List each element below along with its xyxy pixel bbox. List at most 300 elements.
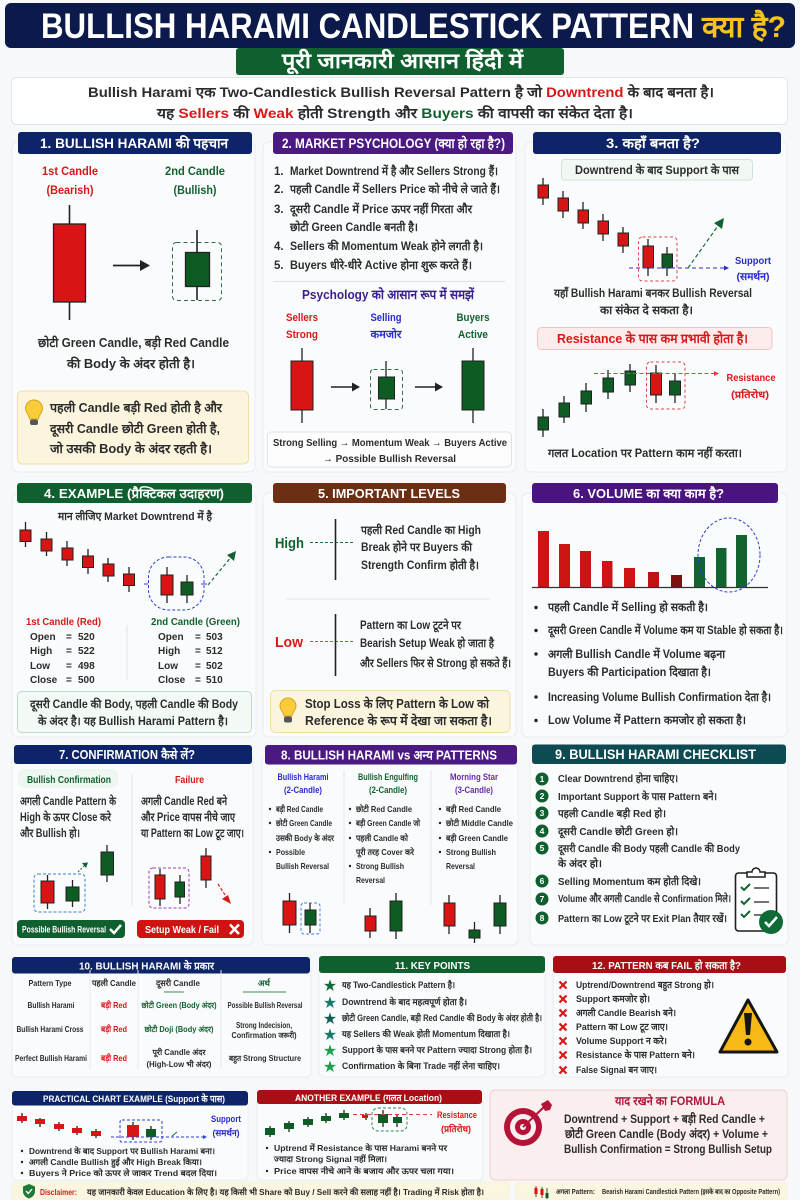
heading 7 bbox=[14, 745, 252, 764]
panel: formula bbox=[490, 1090, 787, 1180]
heading 3: 3. कहाँ बनता है? bbox=[606, 135, 700, 151]
first candle data: 498 bbox=[78, 661, 95, 672]
table row: harami cross: बड़ी Red bbox=[100, 1024, 127, 1034]
numbered list bbox=[274, 164, 500, 273]
icon: warning triangle bbox=[720, 1000, 777, 1052]
failure result button: Setup Weak / Fail bbox=[145, 924, 219, 936]
table header row bbox=[28, 978, 286, 992]
heading bbox=[12, 1091, 248, 1106]
heading 4 bbox=[17, 483, 252, 503]
resistance pill bbox=[538, 328, 772, 350]
table row: bullish harami: Bullish Harami bbox=[28, 1001, 74, 1010]
column: morning star: बड़ी Red Candle bbox=[445, 804, 501, 814]
checklist items: Volume और अगली Candle से Confirmation मिले। bbox=[558, 892, 731, 905]
key point items: ★ bbox=[324, 1027, 337, 1042]
resistance label bbox=[437, 1110, 477, 1134]
bullets: Buyers ने Price को ऊपर ले जाकर Trend बदल दिया। bbox=[29, 1168, 217, 1178]
conclusion box: दूसरी Candle की Body, पहली Candle की Body bbox=[29, 697, 239, 712]
support pill: Downtrend के बाद Support के पास bbox=[575, 163, 740, 177]
blue highlight bbox=[144, 557, 207, 610]
bullets: ज्यादा Strong Signal नहीं मिला। bbox=[273, 1154, 387, 1164]
heading 11 bbox=[319, 956, 545, 973]
next pattern bar bbox=[516, 1183, 787, 1199]
column: bullish harami: बड़ी Red Candle bbox=[275, 804, 323, 814]
disclaimer bar bbox=[12, 1182, 509, 1199]
numbered list: दूसरी Candle में Price ऊपर नहीं गिरता और bbox=[289, 202, 473, 217]
column: bullish engulfing bbox=[349, 772, 421, 885]
resistance label: Resistance bbox=[726, 373, 776, 384]
title banner: क्या है? bbox=[701, 9, 786, 44]
panel 8: harami vs other patterns bbox=[262, 745, 518, 945]
tip box: जो उसकी Body के अंदर रहती है। bbox=[49, 441, 212, 456]
checklist items: 6 bbox=[540, 876, 545, 886]
numbered list: Sellers की Momentum Weak होने लगती है। bbox=[290, 239, 483, 253]
key point items: Support के पास बनने पर Pattern ज्यादा Strong होता है। bbox=[342, 1044, 532, 1055]
table row: harami cross: Confirmation जरूरी) bbox=[232, 1030, 297, 1040]
numbered list: 1. bbox=[274, 166, 284, 178]
checklist items: 7 bbox=[540, 894, 545, 904]
arrow: up bbox=[688, 218, 724, 268]
column: bullish harami: छोटी Green Candle bbox=[275, 818, 332, 828]
panel: another example bbox=[257, 1090, 483, 1180]
table row: harami cross: Strong Indecision, bbox=[236, 1021, 292, 1030]
1st candle label: 1st Candle bbox=[42, 164, 98, 178]
high level text: Strength Confirm होती है। bbox=[361, 558, 479, 572]
checklist items: दूसरी Candle की Body पहली Candle की Body bbox=[557, 842, 740, 856]
failure text bbox=[140, 794, 244, 841]
table row: perfect harami: (High-Low भी अंदर) bbox=[146, 1059, 212, 1069]
column: bullish engulfing: पूरी तरह Cover करे bbox=[355, 847, 414, 858]
key point items: छोटी Green Candle, बड़ी Red Candle की Body के अंदर होती है। bbox=[341, 1012, 542, 1023]
support caption: का संकेत दे सकता है। bbox=[599, 303, 693, 317]
resistance caption: गलत Location पर Pattern काम नहीं करता। bbox=[547, 446, 742, 460]
example candles bbox=[20, 522, 193, 603]
first candle data: Close bbox=[30, 675, 58, 686]
numbered list: 5. bbox=[274, 260, 284, 272]
table row: bullish harami: Possible Bullish Reversal bbox=[228, 1001, 302, 1010]
support caption bbox=[553, 286, 752, 317]
column: morning star bbox=[439, 772, 513, 871]
checklist items: पहली Candle बड़ी Red हो। bbox=[557, 807, 666, 820]
second candle data: Close bbox=[158, 675, 186, 686]
confirmation text: High के ऊपर Close करे bbox=[20, 810, 112, 824]
key point items: Downtrend के बाद महत्वपूर्ण होता है। bbox=[342, 996, 467, 1008]
table row: harami cross: Bullish Harami Cross bbox=[16, 1025, 84, 1034]
support pill bbox=[562, 160, 752, 180]
column: morning star: Reversal bbox=[446, 861, 475, 871]
key point items: यह Sellers की Weak होती Momentum दिखाता है। bbox=[341, 1028, 510, 1039]
first candle data: High bbox=[30, 646, 52, 657]
volume bullets: Buyers की Participation दिखाता है। bbox=[548, 665, 711, 679]
low level text: और Sellers फिर से Strong हो सकते हैं। bbox=[360, 656, 511, 670]
panel 4: example bbox=[12, 483, 256, 737]
key point items: ★ bbox=[324, 1011, 337, 1026]
heading 11: 11. KEY POINTS bbox=[395, 960, 470, 972]
bullets: अगली Candle Bullish हुई और High Break किया। bbox=[29, 1157, 202, 1168]
heading 9 bbox=[532, 744, 786, 764]
1st candle label: (Bearish) bbox=[46, 183, 94, 197]
highlight and support line bbox=[111, 1120, 207, 1142]
table row: harami cross: छोटी Doji (Body अंदर) bbox=[144, 1024, 214, 1034]
flow summary box: → Possible Bullish Reversal bbox=[323, 453, 456, 465]
column: bullish harami: उसकी Body के अंदर bbox=[275, 833, 334, 843]
panel 6: volume bbox=[522, 483, 787, 737]
heading bbox=[257, 1090, 482, 1104]
heading 8: 8. BULLISH HARAMI vs अन्य PATTERNS bbox=[281, 748, 497, 762]
title banner: BULLISH HARAMI CANDLESTICK PATTERN bbox=[41, 7, 694, 46]
bullets bbox=[266, 1143, 454, 1176]
big red candle bbox=[54, 205, 86, 320]
panel 1: identification bbox=[12, 132, 255, 472]
failure items: Uptrend/Downtrend बहुत Strong हो। bbox=[576, 979, 714, 992]
2nd candle label: 2nd Candle bbox=[165, 164, 225, 178]
formula text: Downtrend + Support + बड़ी Red Candle + bbox=[564, 1112, 765, 1126]
key point items: ★ bbox=[324, 1059, 337, 1074]
column: morning star: छोटी Middle Candle bbox=[445, 818, 513, 828]
tip box: दूसरी Candle छोटी Green होती है, bbox=[49, 421, 220, 438]
table row: bullish harami: छोटी Green (Body अंदर) bbox=[141, 1000, 217, 1010]
key point items: Confirmation के बिना Trade नहीं लेना चाहिए। bbox=[342, 1060, 500, 1071]
first candle data bbox=[26, 616, 101, 686]
assumption text: मान लीजिए Market Downtrend में है bbox=[57, 509, 213, 523]
panel 5: important levels bbox=[263, 483, 516, 737]
tip box: पहली Candle बड़ी Red होती है और bbox=[49, 400, 223, 415]
downtrend candles bbox=[538, 178, 672, 276]
failure items: Volume Support न करे। bbox=[576, 1035, 667, 1047]
caption: की Body के अंदर होती है। bbox=[66, 356, 195, 371]
column: morning star: Morning Star bbox=[450, 772, 498, 782]
column: bullish harami bbox=[269, 772, 334, 871]
intro text box: यह Sellers की Weak होती Strength और Buyers की वापसी का संकेत देता है। bbox=[156, 105, 633, 121]
formula text bbox=[564, 1112, 772, 1156]
checklist items: 5 bbox=[540, 843, 545, 853]
checklist items: Selling Momentum कम होती दिखे। bbox=[558, 875, 701, 888]
heading 10: 10. BULLISH HARAMI के प्रकार bbox=[79, 960, 215, 972]
bullish result button bbox=[17, 920, 125, 938]
first candle data: 500 bbox=[78, 675, 95, 686]
failure items: Resistance के पास Pattern बने। bbox=[576, 1049, 695, 1061]
failure items: Support कमजोर हो। bbox=[576, 993, 650, 1005]
subtitle ribbon bbox=[236, 48, 564, 75]
numbered list: 4. bbox=[274, 241, 284, 253]
support label bbox=[211, 1114, 241, 1138]
failure result button bbox=[137, 920, 244, 938]
volume bar chart bbox=[532, 518, 768, 592]
low level text: Pattern का Low टूटने पर bbox=[360, 618, 462, 633]
caption bbox=[37, 335, 229, 371]
formula heading: याद रखने का FORMULA bbox=[614, 1094, 725, 1108]
subtitle ribbon: पूरी जानकारी आसान हिंदी में bbox=[281, 48, 525, 75]
volume bullets: अगली Bullish Candle में Volume बढ़ना bbox=[548, 647, 726, 661]
comparison candles bbox=[283, 893, 506, 943]
first candle data: = bbox=[66, 646, 72, 657]
intro text box: Bullish Harami एक Two-Candlestick Bullish Reversal Pattern है जो Downtrend के बाद बनता है। bbox=[88, 84, 714, 100]
checklist items bbox=[536, 772, 740, 926]
first candle data: = bbox=[66, 661, 72, 672]
numbered list: छोटी Green Candle बनती है। bbox=[289, 220, 418, 234]
formula text: छोटी Green Candle (Body अंदर) + Volume + bbox=[564, 1127, 768, 1141]
confirmation candles bbox=[34, 845, 114, 912]
icon: mini candles bbox=[534, 1186, 548, 1199]
arrow: up bbox=[208, 551, 236, 585]
second candle data bbox=[151, 616, 240, 686]
table header row: दूसरी Candle bbox=[155, 978, 200, 989]
panel 2: market psychology bbox=[263, 132, 516, 472]
heading 7: 7. CONFIRMATION कैसे लें? bbox=[59, 747, 195, 762]
candles bbox=[265, 1110, 402, 1137]
first candle data: = bbox=[66, 632, 72, 643]
column: morning star: बड़ी Green Candle bbox=[445, 833, 508, 843]
table row: harami cross bbox=[16, 1021, 297, 1040]
labels: sellers, selling, buyers: कमजोर bbox=[369, 327, 402, 341]
labels: sellers, selling, buyers bbox=[286, 312, 490, 341]
panel 3: where it forms bbox=[525, 132, 787, 472]
column: bullish engulfing: (2-Candle) bbox=[369, 785, 407, 795]
column: bullish engulfing: Bullish Engulfing bbox=[358, 772, 418, 783]
heading 3 bbox=[533, 132, 781, 154]
numbered list: Buyers धीरे-धीरे Active होना शुरू करते हैं। bbox=[290, 258, 472, 273]
labels: sellers, selling, buyers: Active bbox=[458, 329, 488, 341]
checklist items: Clear Downtrend होना चाहिए। bbox=[558, 772, 678, 785]
labels: sellers, selling, buyers: Selling bbox=[370, 312, 402, 324]
heading 6: 6. VOLUME का क्या काम है? bbox=[573, 486, 724, 501]
volume bullets: Low Volume में Pattern कमजोर हो सकता है। bbox=[548, 713, 746, 727]
second candle data: 512 bbox=[206, 646, 223, 657]
heading 2: 2. MARKET PSYCHOLOGY (क्या हो रहा है?) bbox=[282, 135, 505, 151]
icon: bulb bbox=[26, 400, 42, 425]
checklist items: Important Support के पास Pattern बने। bbox=[558, 790, 717, 803]
checklist items: 3 bbox=[540, 808, 545, 818]
heading: PRACTICAL CHART EXAMPLE (Support के पास) bbox=[43, 1093, 225, 1105]
resistance label bbox=[726, 373, 776, 401]
resistance label: (प्रतिरोध) bbox=[731, 388, 769, 401]
second candle data: = bbox=[195, 661, 201, 672]
2nd candle label bbox=[165, 164, 225, 197]
2nd candle label: (Bullish) bbox=[174, 183, 216, 197]
high level text: पहली Red Candle का High bbox=[360, 523, 481, 537]
bullets bbox=[21, 1146, 217, 1178]
key point items: ★ bbox=[324, 1043, 337, 1058]
first candle data: 520 bbox=[78, 632, 95, 643]
flow summary box: Strong Selling → Momentum Weak → Buyers Active bbox=[273, 437, 507, 449]
1st candle label bbox=[42, 164, 98, 197]
high level text bbox=[360, 523, 481, 572]
bullets: Downtrend के बाद Support पर Bullish Harami बना। bbox=[29, 1146, 215, 1156]
tip box bbox=[18, 391, 248, 464]
resistance highlight and line bbox=[594, 362, 719, 409]
key point items: यह Two-Candlestick Pattern है। bbox=[341, 979, 455, 990]
heading 10 bbox=[12, 957, 310, 974]
heading 5: 5. IMPORTANT LEVELS bbox=[318, 486, 460, 501]
table header row: पहली Candle bbox=[91, 978, 136, 988]
low level text bbox=[360, 618, 511, 670]
checklist items: 8 bbox=[540, 913, 545, 923]
second candle data: High bbox=[158, 646, 180, 657]
numbered list: 2. bbox=[274, 184, 284, 196]
checklist items: 1 bbox=[540, 774, 545, 784]
second candle data: 510 bbox=[206, 675, 223, 686]
volume bullets: पहली Candle में Selling हो सकती है। bbox=[547, 600, 708, 614]
psychology subheading: Psychology को आसान रूप में समझें bbox=[302, 287, 475, 302]
low level text: Bearish Setup Weak हो जाता है bbox=[360, 636, 495, 650]
table row: perfect harami bbox=[15, 1047, 301, 1069]
small green candle in dashed box bbox=[172, 230, 222, 300]
candles bbox=[17, 1113, 156, 1140]
first candle data: 522 bbox=[78, 646, 95, 657]
arrow bbox=[113, 260, 150, 271]
checklist items: दूसरी Candle छोटी Green हो। bbox=[557, 825, 678, 839]
table row: bullish harami bbox=[28, 1000, 302, 1010]
intro text box bbox=[12, 78, 788, 124]
next pattern bar: अगला Pattern: bbox=[556, 1189, 595, 1196]
column: bullish engulfing: Reversal bbox=[356, 875, 385, 885]
labels: sellers, selling, buyers: Buyers bbox=[456, 312, 490, 324]
labels: sellers, selling, buyers: Strong bbox=[286, 329, 318, 341]
icon: clipboard bbox=[736, 868, 783, 934]
heading 9: 9. BULLISH HARAMI CHECKLIST bbox=[555, 747, 757, 762]
high level text: Break होने पर Buyers की bbox=[361, 540, 473, 554]
confirmation text bbox=[20, 794, 117, 840]
failure text: और Price वापस नीचे जाए bbox=[141, 810, 236, 824]
panel 11: key points bbox=[319, 956, 545, 1077]
checklist items: Pattern का Low टूटने पर Exit Plan तैयार रखें। bbox=[558, 912, 727, 926]
heading 4: 4. EXAMPLE (प्रैक्टिकल उदाहरण) bbox=[44, 486, 224, 501]
heading 2 bbox=[273, 132, 513, 154]
heading 1 bbox=[18, 132, 252, 154]
second candle data: Open bbox=[158, 632, 184, 643]
numbered list: Market Downtrend में है और Sellers Strong हैं। bbox=[290, 164, 498, 178]
table row: perfect harami: बड़ी Red bbox=[100, 1053, 127, 1063]
table row: perfect harami: पूरी Candle अंदर bbox=[152, 1047, 206, 1058]
panel 10: types table bbox=[12, 957, 311, 1077]
heading: ANOTHER EXAMPLE (गलत Location) bbox=[295, 1093, 442, 1104]
bullets: Price वापस नीचे आने के बजाय और ऊपर चला गया। bbox=[274, 1166, 454, 1176]
failure label: Failure bbox=[175, 774, 204, 786]
low level diagram bbox=[275, 614, 353, 676]
support label: Support bbox=[735, 255, 771, 267]
support label: Support bbox=[211, 1114, 241, 1124]
heading 1: 1. BULLISH HARAMI की पहचान bbox=[40, 135, 229, 151]
column: bullish engulfing: पहली Candle को bbox=[355, 833, 409, 843]
second candle data: 502 bbox=[206, 661, 223, 672]
first candle data: = bbox=[66, 675, 72, 686]
column: bullish harami: Bullish Reversal bbox=[276, 861, 329, 871]
bullish confirmation label bbox=[18, 769, 118, 788]
key point items bbox=[324, 978, 542, 1074]
support label: (समर्थन) bbox=[736, 270, 770, 283]
failure items bbox=[560, 979, 714, 1076]
numbered list: पहली Candle में Sellers Price को नीचे ले जाते हैं। bbox=[289, 182, 500, 196]
column: morning star: (3-Candle) bbox=[455, 785, 493, 795]
table row: bullish harami: बड़ी Red bbox=[100, 1000, 127, 1010]
conclusion box: के अंदर है। यह Bullish Harami Pattern है। bbox=[37, 714, 228, 728]
resistance label: (प्रतिरोध) bbox=[441, 1123, 471, 1134]
psychology candles and arrows bbox=[291, 348, 484, 423]
stop loss tip bbox=[270, 690, 510, 732]
confirmation text: अगली Candle Pattern के bbox=[20, 794, 117, 808]
high level diagram bbox=[275, 519, 353, 580]
second candle data: = bbox=[195, 632, 201, 643]
column: bullish engulfing: बड़ी Green Candle जो bbox=[355, 818, 421, 828]
first candle data: 1st Candle (Red) bbox=[26, 616, 101, 628]
labels: sellers, selling, buyers: Sellers bbox=[286, 312, 318, 324]
caption: छोटी Green Candle, बड़ी Red Candle bbox=[37, 335, 229, 350]
support label: (समर्थन) bbox=[212, 1127, 240, 1138]
confirmation text: और Bullish हो। bbox=[20, 826, 80, 840]
key point items: ★ bbox=[324, 978, 337, 993]
column: bullish engulfing: Strong Bullish bbox=[356, 861, 404, 871]
bullets: Uptrend में Resistance के पास Harami बनने पर bbox=[274, 1143, 448, 1153]
harami highlight and support line bbox=[629, 237, 729, 281]
key point items: ★ bbox=[324, 995, 337, 1010]
second candle data: 2nd Candle (Green) bbox=[151, 616, 240, 628]
numbered list: 3. bbox=[274, 204, 284, 216]
second candle data: Low bbox=[158, 661, 178, 672]
failure items: अगली Candle Bearish बने। bbox=[576, 1007, 676, 1019]
icon: bulb bbox=[280, 698, 296, 722]
checklist items: के अंदर हो। bbox=[557, 857, 602, 870]
bullish result button: Possible Bullish Reversal bbox=[22, 924, 106, 936]
volume bullets: Increasing Volume Bullish Confirmation देता है। bbox=[548, 690, 771, 704]
heading 5 bbox=[273, 483, 506, 503]
disclaimer bar: यह जानकारी केवल Education के लिए है। यह किसी भी Share को Buy / Sell करने की सलाह नहीं है। Trading में Risk होता है। bbox=[86, 1187, 484, 1197]
support label bbox=[735, 255, 771, 283]
flow summary box bbox=[268, 432, 512, 467]
disclaimer bar: Disclaimer: bbox=[40, 1187, 77, 1197]
failure items: False Signal बन जाए। bbox=[576, 1065, 657, 1076]
column: bullish harami: (2-Candle) bbox=[284, 785, 322, 795]
table row: perfect harami: Perfect Bullish Harami bbox=[15, 1054, 87, 1063]
failure candles bbox=[149, 848, 231, 908]
second candle data: = bbox=[195, 675, 201, 686]
column: bullish harami: Bullish Harami bbox=[278, 772, 328, 782]
icon: shield bbox=[23, 1184, 35, 1198]
stop loss tip: Stop Loss के लिए Pattern के Low को bbox=[305, 696, 490, 711]
low level diagram: Low bbox=[275, 634, 303, 651]
support caption: यहाँ Bullish Harami बनकर Bullish Reversal bbox=[553, 286, 752, 300]
table header row: Pattern Type bbox=[28, 978, 72, 988]
column: bullish engulfing: छोटी Red Candle bbox=[355, 804, 412, 814]
second candle data: 503 bbox=[206, 632, 223, 643]
column: morning star: Strong Bullish bbox=[446, 847, 496, 857]
checklist items: 4 bbox=[540, 826, 545, 836]
failure items: Pattern का Low टूट जाए। bbox=[576, 1022, 668, 1033]
heading 12 bbox=[553, 956, 786, 973]
bullish confirmation label: Bullish Confirmation bbox=[27, 774, 111, 786]
stop loss tip: Reference के रूप में देखा जा सकता है। bbox=[305, 713, 492, 728]
resistance pill: Resistance के पास कम प्रभावी होता है। bbox=[557, 331, 748, 346]
table header row: अर्थ bbox=[258, 978, 271, 988]
heading 6 bbox=[532, 483, 778, 503]
high level diagram: High bbox=[275, 535, 304, 552]
first candle data: Open bbox=[30, 632, 56, 643]
column: bullish harami: Possible bbox=[276, 847, 305, 857]
panel 7: confirmation bbox=[12, 745, 253, 945]
checklist items: 2 bbox=[540, 791, 545, 801]
resistance label: Resistance bbox=[437, 1110, 477, 1120]
highlight and resistance line bbox=[353, 1108, 432, 1131]
failure text: या Pattern का Low टूट जाए। bbox=[140, 828, 244, 841]
panel 9: checklist bbox=[530, 744, 788, 945]
heading 12: 12. PATTERN कब FAIL हो सकता है? bbox=[592, 959, 741, 972]
panel 12: when pattern fails bbox=[553, 956, 788, 1077]
volume bullets bbox=[534, 600, 783, 727]
conclusion box bbox=[18, 692, 252, 732]
first candle data: Low bbox=[30, 661, 50, 672]
table row: perfect harami: बहुत Strong Structure bbox=[228, 1054, 301, 1064]
uptrend candles bbox=[538, 364, 680, 437]
failure text: अगली Candle Red बने bbox=[141, 794, 227, 808]
